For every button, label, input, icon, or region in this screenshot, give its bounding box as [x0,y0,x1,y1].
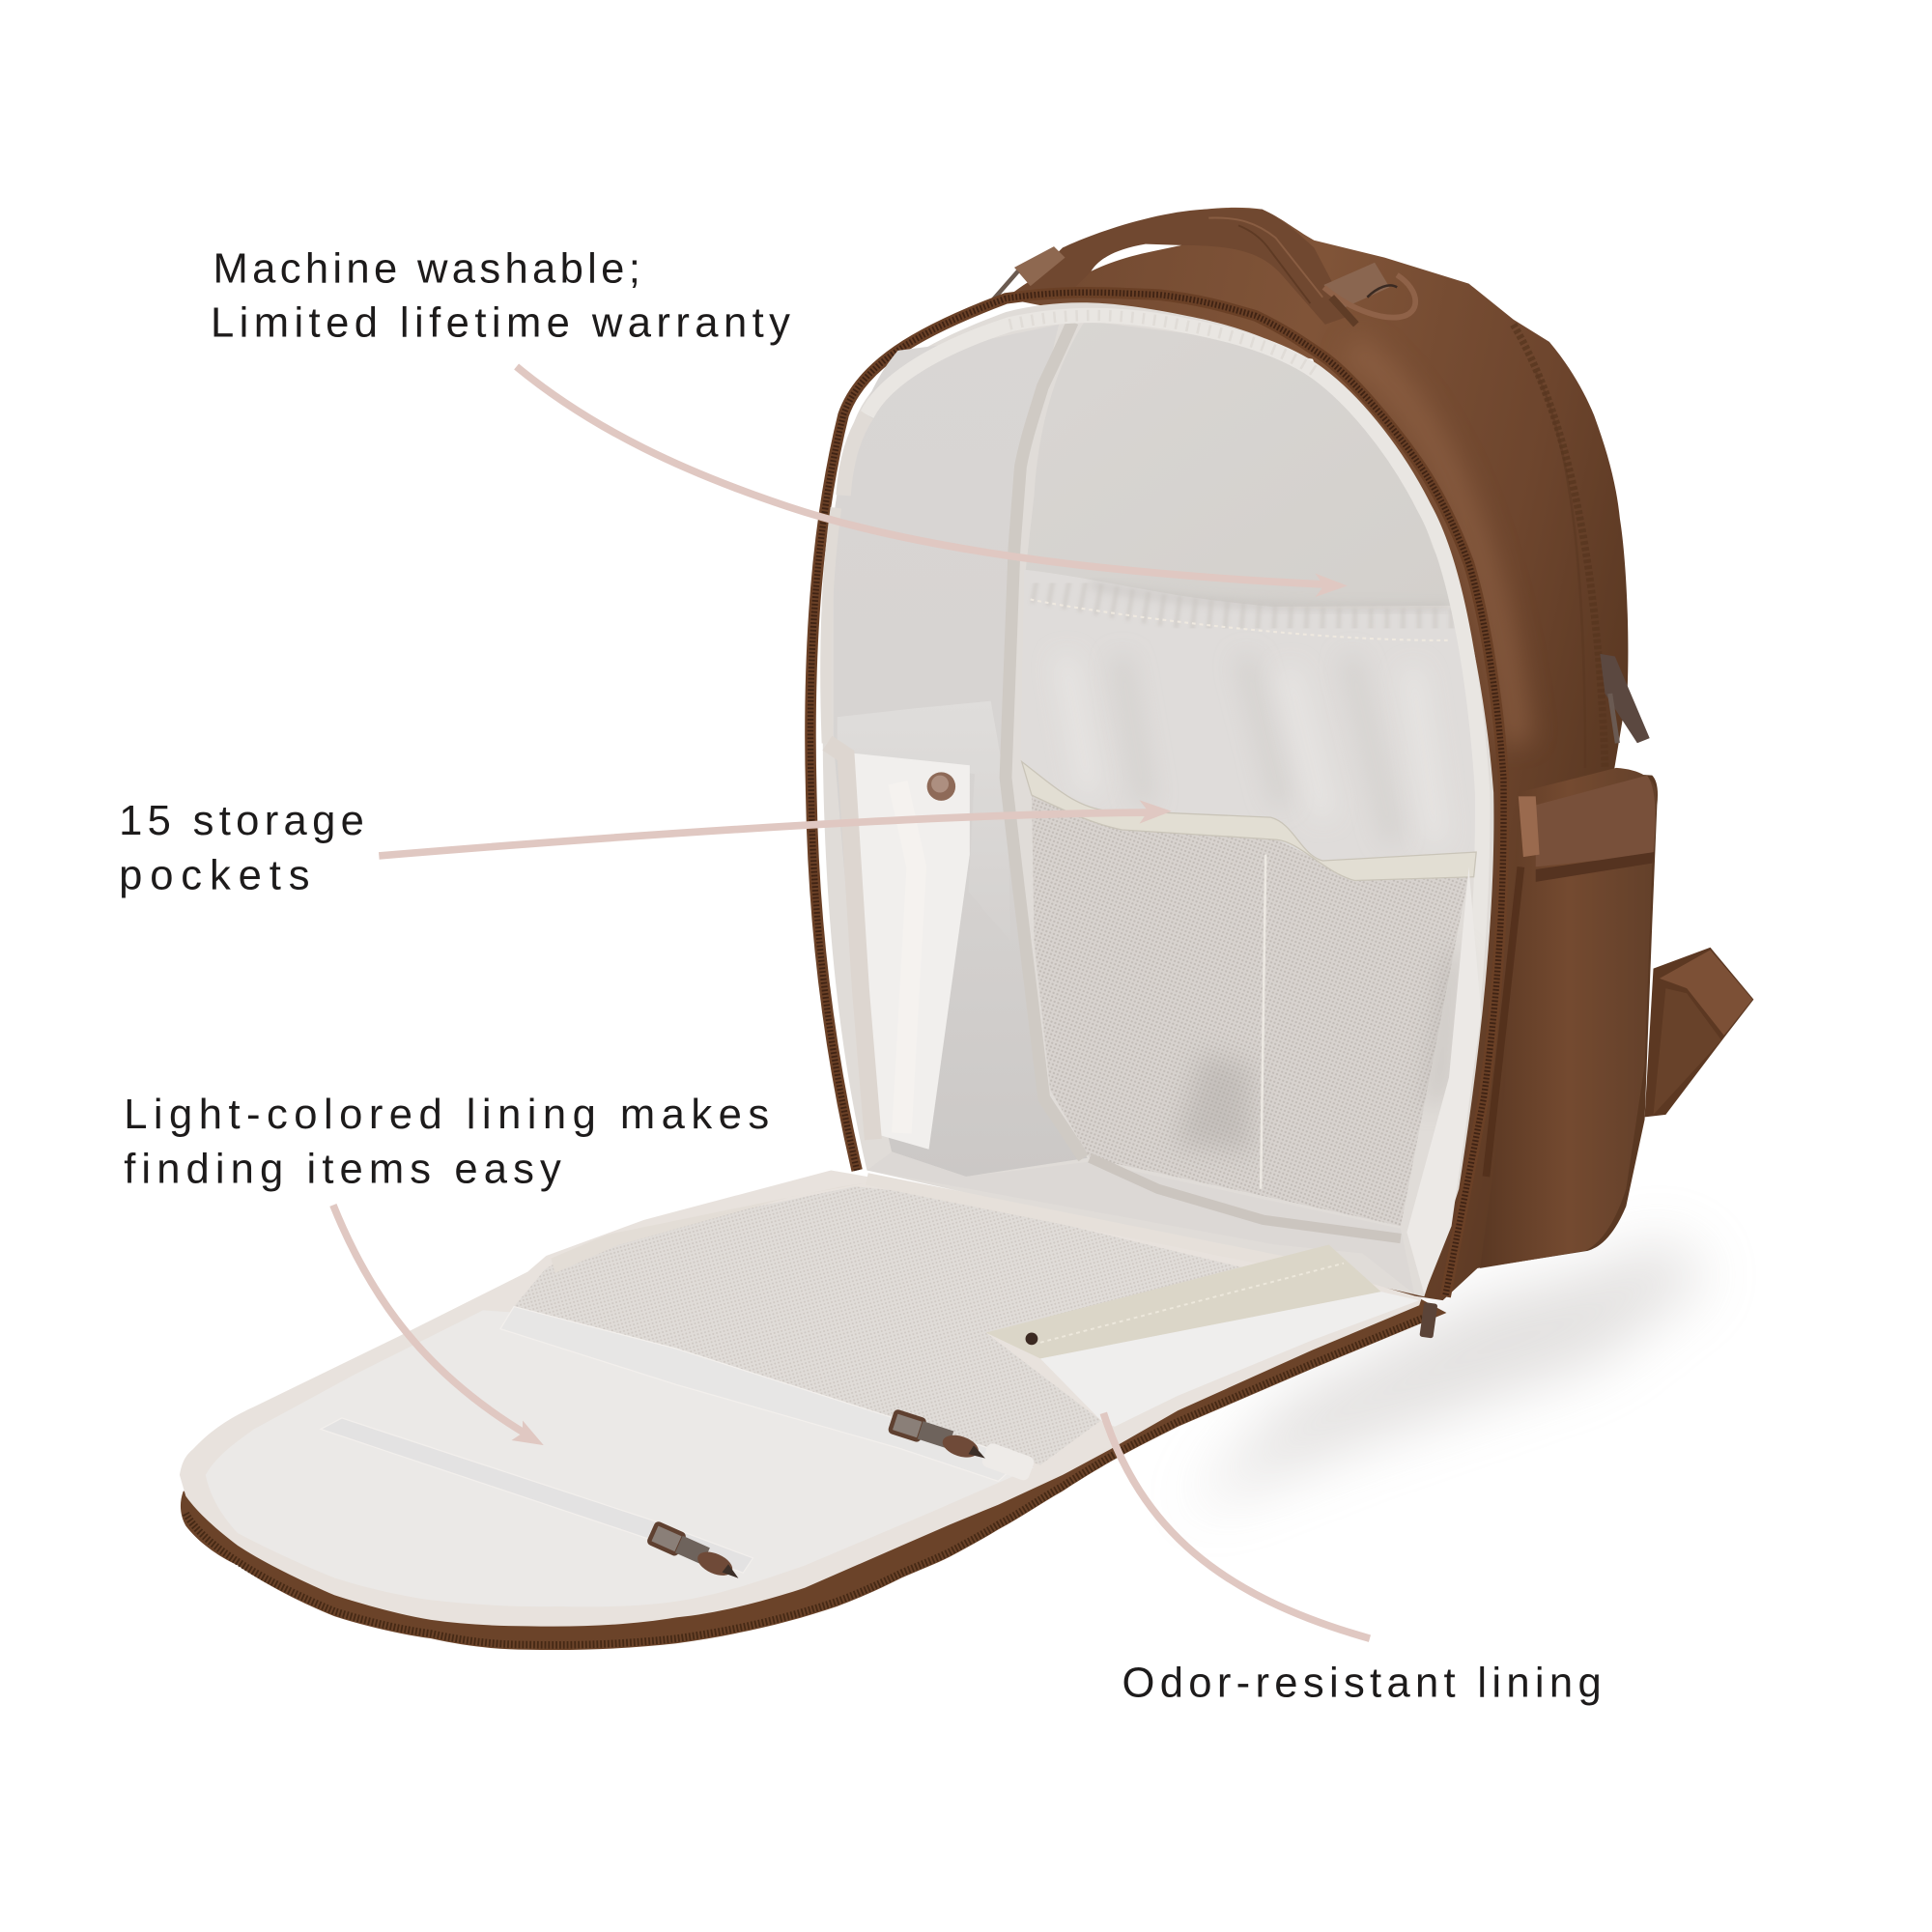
strap loops and D-rings [992,246,1415,325]
zipper around opening [810,293,1504,1296]
label: light-colored lining: Light-colored lining makes [124,1092,769,1138]
front flap zipper edge [181,1294,1446,1650]
top handle [1018,210,1350,325]
snap button [927,772,955,801]
side pocket [1480,768,1657,1268]
white snap flap [827,743,970,1150]
velcro strip [986,1244,1380,1358]
white lining edge, upper shell [826,315,1483,1189]
callout arrow: machine washable [517,366,1348,597]
backpack illustration [180,208,1753,1650]
flap mesh panel [514,1186,1276,1465]
label: machine washable, warranty [211,245,790,347]
bottom zipper pull [1419,1302,1437,1339]
callout arrow: storage pockets [379,800,1172,856]
flap inner panel [206,1310,1035,1606]
left wall lower crease [838,701,1010,941]
label: odor-resistant lining: Odor-resistant lining [1122,1660,1602,1706]
front flap cream lining [180,1171,1422,1627]
right lower lining edge [1406,867,1481,1294]
zipper strip lower [321,1418,753,1584]
label: storage pockets: pockets [119,853,310,899]
zipper strip upper [500,1307,1036,1482]
interior lining [823,302,1493,1296]
pleated elastic pocket [1020,570,1480,879]
lower zipper pull [647,1523,746,1584]
callout arrow: light lining [333,1205,544,1445]
handle gap [1091,244,1181,271]
flap top strap [552,1182,867,1273]
upper back wall [1026,321,1455,607]
white pocket under strap [1040,1292,1419,1427]
label: machine washable, warranty: Machine washable; [213,245,640,292]
divider seam [1006,322,1084,1158]
interior floor [867,1151,1414,1294]
side zipper pull [1600,654,1650,743]
shell highlights and stitching [1350,325,1605,768]
backpack outer shell [1006,208,1658,1300]
label: storage pockets [119,798,364,899]
ground shadow [1189,1238,1709,1511]
left wall [834,325,1088,1177]
shoulder strap [1645,948,1753,1117]
upper zipper pull [889,1411,990,1464]
label: storage pockets: 15 storage [119,798,364,844]
label: light-colored lining [124,1092,769,1192]
logo mark [1026,1332,1037,1345]
label: machine washable, warranty: Limited lifetime warranty [211,300,790,347]
flap top seam [867,1179,1300,1265]
mesh pocket [1022,761,1476,1226]
callout line: odor-resistant [1103,1413,1370,1638]
mesh pocket elastic band [1022,761,1476,881]
label: light-colored lining: finding items easy [124,1146,561,1192]
